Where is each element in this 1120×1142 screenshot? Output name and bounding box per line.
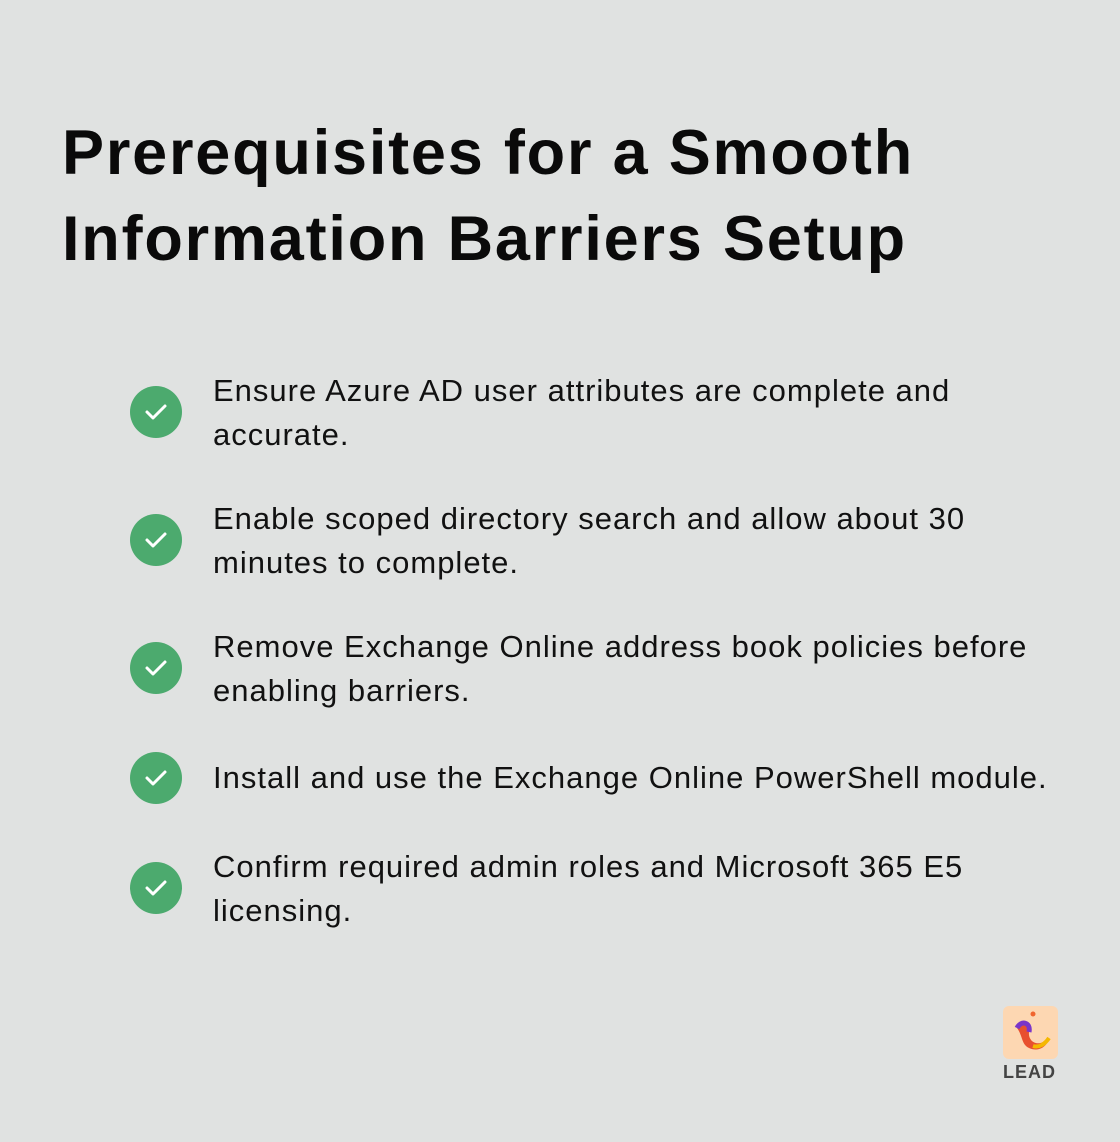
text	[213, 501, 965, 580]
title	[62, 118, 914, 274]
text: Ensure Azure AD user attributes are complete and	[213, 373, 950, 408]
text: licensing.	[213, 893, 352, 928]
text	[213, 373, 950, 452]
text: minutes to complete.	[213, 545, 519, 580]
text	[213, 849, 963, 928]
title: Prerequisites for a Smooth	[62, 118, 914, 188]
logo icon	[1003, 1006, 1058, 1059]
text: Enable scoped directory search and allow about 30	[213, 501, 965, 536]
logo text: LEAD	[1003, 1062, 1056, 1082]
item 4	[130, 752, 1048, 804]
text: accurate.	[213, 417, 350, 452]
logo	[1003, 1006, 1058, 1082]
icon: check	[130, 642, 182, 694]
item 5	[130, 849, 963, 928]
icon: check	[130, 386, 182, 438]
text	[213, 629, 1027, 708]
item 1	[130, 373, 950, 452]
item 2	[130, 501, 965, 580]
text: Confirm required admin roles and Microsoft 365 E5	[213, 849, 963, 884]
text: Install and use the Exchange Online PowerShell module.	[213, 760, 1048, 795]
icon: check	[130, 752, 182, 804]
title: Information Barriers Setup	[62, 204, 907, 274]
text: Remove Exchange Online address book policies before	[213, 629, 1027, 664]
icon: check	[130, 862, 182, 914]
item 3	[130, 629, 1027, 708]
text: enabling barriers.	[213, 673, 471, 708]
icon: check	[130, 514, 182, 566]
